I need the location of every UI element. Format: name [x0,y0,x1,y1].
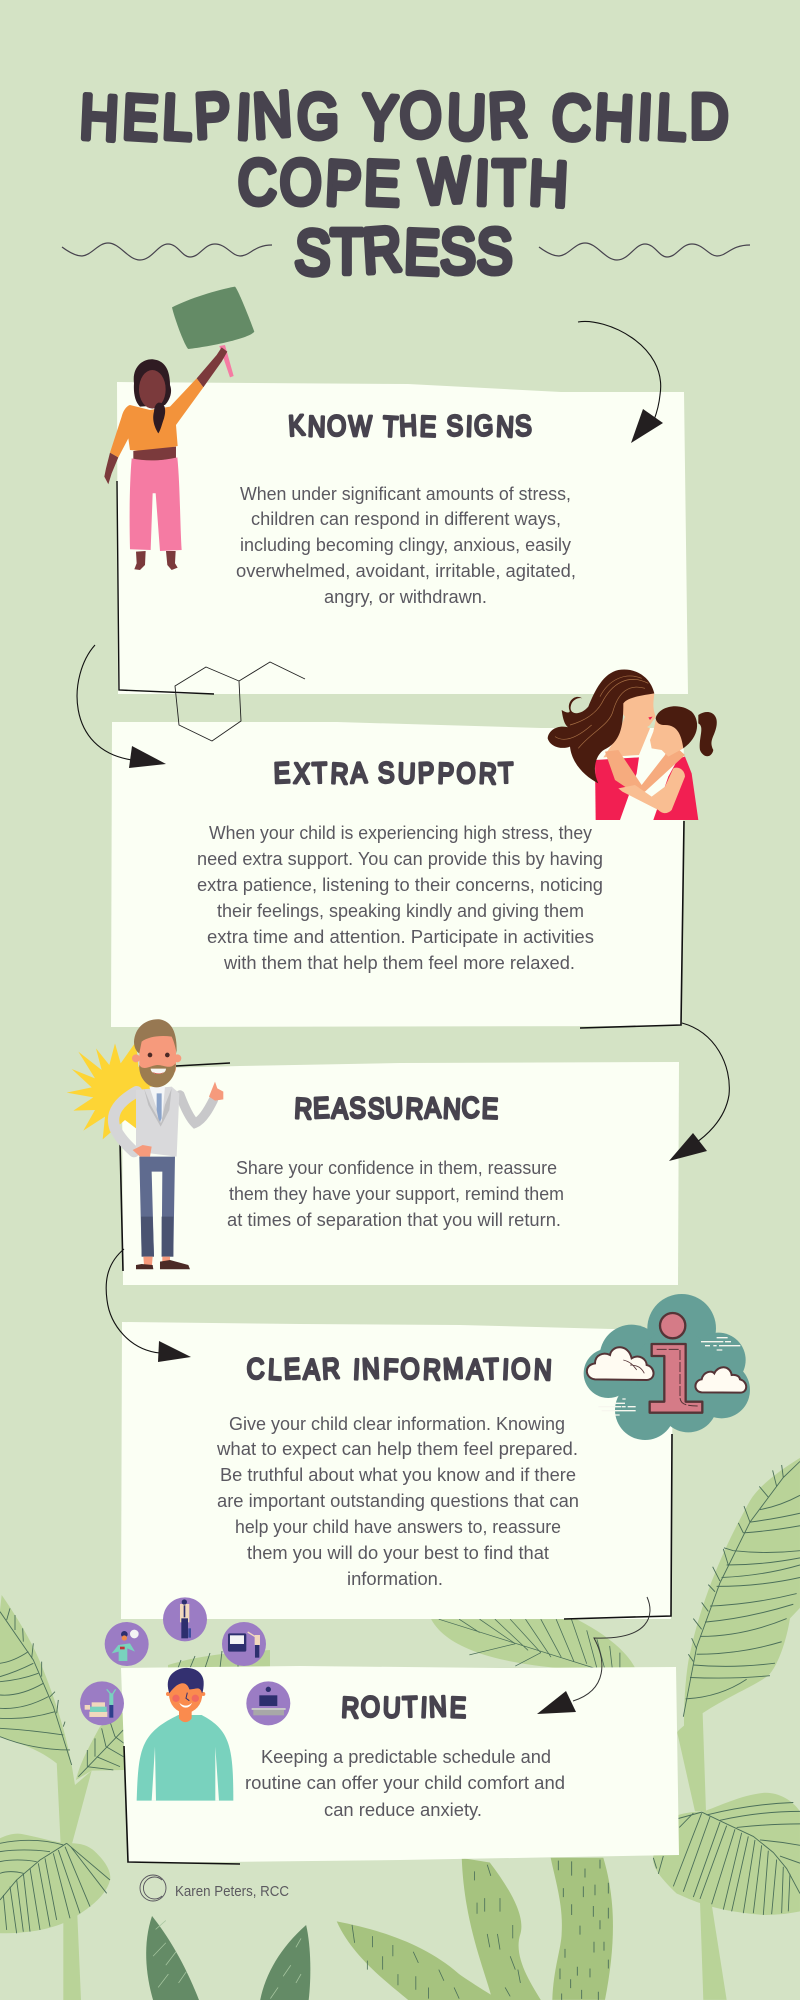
body text: including becoming clingy, anxious, easily [240,535,571,555]
card outline stroke [120,1063,230,1271]
panel: clear information [121,1322,673,1619]
heading: CLEAR INFORMATION [246,1352,552,1387]
panel: know the signs [117,382,688,694]
body text: them they have your support, remind them [229,1184,564,1204]
green sign [172,287,254,349]
title: STRESS [293,214,512,289]
person [137,1715,233,1801]
body text: children can respond in different ways, [251,509,561,529]
heading: EXTRA SUPPORT [273,756,514,791]
card outline stroke [580,821,684,1028]
title: HELPING YOUR CHILD [78,79,728,154]
icon circle: breakfast and clock [105,1622,149,1666]
icon circle: computer desk [246,1681,290,1725]
illustration: girl holding sign [104,287,254,570]
icon circle: standing with suitcase [163,1597,207,1641]
background plants: centre and bottom leaves [146,1619,635,2000]
title [78,79,728,289]
body text: them you will do your best to find that [247,1543,549,1563]
icon circle: waking in bed [80,1681,124,1725]
card outline stroke [117,481,214,694]
body text: Be truthful about what you know and if there [220,1465,576,1485]
card outline stroke [124,1746,240,1864]
panel: routine [121,1666,679,1864]
card background [111,722,684,1027]
card background [121,1322,673,1619]
arrow 5 [537,1597,650,1714]
body text [197,823,603,973]
card background [121,1666,679,1863]
copyright line: Karen Peters, RCC [175,1883,289,1900]
wind dashes [598,1338,740,1415]
wavy divider right [539,243,750,260]
body text: overwhelmed, avoidant, irritable, agitated, [236,561,576,581]
heading: ROUTINE [341,1690,467,1725]
card background [117,382,688,694]
wavy divider left [62,243,272,260]
body text: what to expect can help them feel prepared. [216,1439,578,1459]
title: COPE WITH [238,145,569,220]
illustration: mother and daughter [548,669,717,820]
illustration: young man with routine icons [80,1597,290,1801]
arrow 3 [669,1023,729,1161]
copyright line [140,1875,289,1901]
heading: REASSURANCE [294,1091,499,1126]
body text: extra patience, listening to their concerns, noticing [197,875,603,895]
body text: with them that help them feel more relaxed. [223,953,575,973]
body text: help your child have answers to, reassure [235,1517,561,1537]
body text [245,1747,565,1820]
body text: can reduce anxiety. [324,1800,482,1820]
body text: When your child is experiencing high stress, they [209,823,592,843]
body text: at times of separation that you will return. [227,1210,561,1230]
illustration: info cloud [584,1294,750,1440]
body text: Keeping a predictable schedule and [261,1747,551,1767]
body text: are important outstanding questions that can [217,1491,579,1511]
body text [236,484,576,607]
arrow 1 [578,321,663,443]
body text [216,1414,579,1589]
molecule line drawing [175,662,305,741]
body text [227,1158,564,1230]
body text: angry, or withdrawn. [324,587,487,607]
arrow 2 [77,645,166,768]
background plants: left side [0,1595,124,2000]
illustration: man with thumb up and sunburst [67,1019,223,1269]
background plants: right side [551,1458,800,2000]
body text: Share your confidence in them, reassure [236,1158,557,1178]
body text: Give your child clear information. Knowing [229,1414,565,1434]
card outline stroke [564,1434,672,1619]
arrow 4 [106,1249,191,1362]
letter i [650,1313,702,1413]
clouds [587,1347,654,1380]
teal cloud [584,1294,750,1440]
panel: extra support [111,722,684,1028]
heading: KNOW THE SIGNS [287,409,532,444]
body text: information. [347,1569,443,1589]
body text: extra time and attention. Participate in activities [207,927,594,947]
body text: their feelings, speaking kindly and giving them [217,901,584,921]
body text: routine can offer your child comfort and [245,1773,565,1793]
panel: reassurance [120,1062,679,1285]
icon circle: bus [222,1622,266,1666]
body text: When under significant amounts of stress, [240,484,571,504]
background plants: small leaf tip behind routine panel [168,1650,270,1670]
body text: need extra support. You can provide this by having [197,849,603,869]
card background [122,1062,679,1285]
sunburst [67,1042,157,1139]
